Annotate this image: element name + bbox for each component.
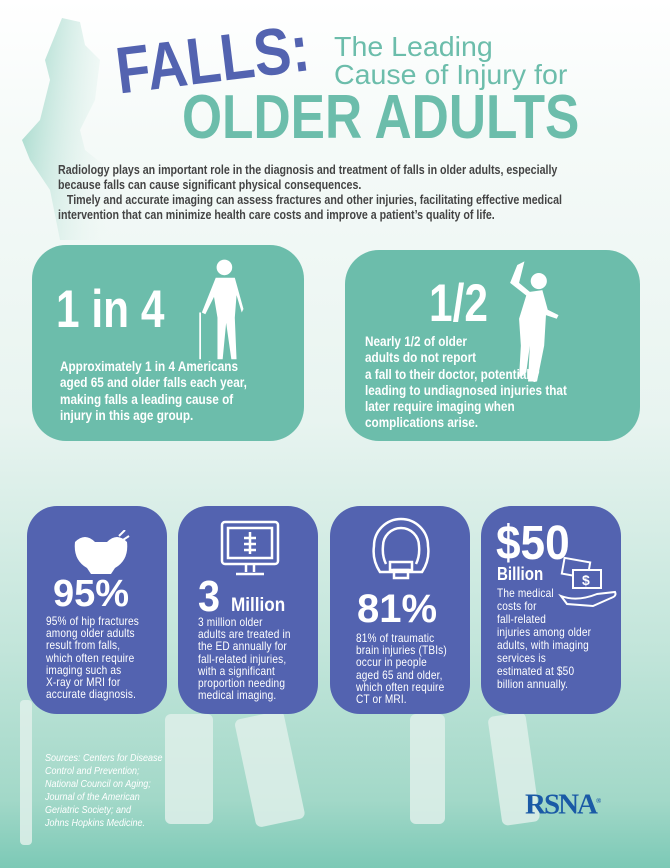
panel: 95% bbox=[27, 506, 167, 714]
description: aged 65 and older, bbox=[356, 668, 443, 682]
intro text: intervention that can minimize health care costs and improve a patient’s quality of life. bbox=[58, 207, 495, 222]
sources: Johns Hopkins Medicine. bbox=[45, 818, 145, 829]
description bbox=[46, 614, 139, 701]
intro text: Radiology plays an important role in the diagnosis and treatment of falls in older adults, especially bbox=[58, 162, 557, 177]
description: injuries among older bbox=[497, 625, 591, 639]
label Billion: Billion bbox=[497, 564, 543, 584]
description bbox=[497, 586, 591, 691]
stat 1 in 4: 1 in 4 bbox=[56, 280, 164, 339]
description: leading to undiagnosed injuries that bbox=[365, 382, 567, 398]
description: 81% of traumatic bbox=[356, 631, 434, 645]
panel: 3 Million bbox=[178, 506, 318, 714]
description bbox=[60, 358, 247, 423]
description: later require imaging when bbox=[365, 398, 515, 414]
description: services is bbox=[497, 651, 546, 665]
description: making falls a leading cause of bbox=[60, 391, 233, 407]
sources bbox=[45, 753, 163, 829]
description: accurate diagnosis. bbox=[46, 687, 136, 701]
description: estimated at $50 bbox=[497, 664, 574, 678]
description: the ED annually for bbox=[198, 639, 287, 653]
title: FALLS: FALLS: bbox=[112, 10, 313, 107]
description: brain injuries (TBIs) bbox=[356, 643, 447, 657]
description: 95% of hip fractures bbox=[46, 614, 139, 628]
description: injury in this age group. bbox=[60, 407, 193, 423]
sources: Geriatric Society; and bbox=[45, 805, 131, 816]
description: which often require bbox=[46, 651, 134, 665]
sources: Control and Prevention; bbox=[45, 766, 140, 777]
title: OLDER ADULTS: OLDER ADULTS bbox=[182, 83, 579, 152]
icon: falling person bbox=[510, 262, 558, 382]
description: fall-related bbox=[497, 612, 546, 626]
description: Nearly 1/2 of older bbox=[365, 333, 467, 349]
subtitle bbox=[334, 31, 567, 90]
panel: 81% bbox=[330, 506, 470, 714]
description: The medical bbox=[497, 586, 554, 600]
stat 3 Million: 3 Million bbox=[198, 572, 285, 621]
description: adults are treated in bbox=[198, 627, 291, 641]
description: medical imaging. bbox=[198, 688, 276, 702]
stat 1/2: 1/2 bbox=[429, 274, 488, 333]
description: which often require bbox=[356, 680, 444, 694]
sources: Journal of the American bbox=[45, 792, 140, 803]
description: billion annually. bbox=[497, 677, 568, 691]
stat 95%: 95% bbox=[53, 573, 129, 615]
icon: elderly man with cane bbox=[199, 260, 244, 360]
description bbox=[198, 615, 291, 702]
description: 3 million older bbox=[198, 615, 263, 629]
sources: National Council on Aging; bbox=[45, 779, 151, 790]
stat 81%: 81% bbox=[357, 587, 437, 631]
icon: money hand bbox=[558, 556, 616, 607]
description: X-ray or MRI for bbox=[46, 675, 120, 689]
logo: RSNA: RSNA® bbox=[525, 789, 599, 821]
description bbox=[365, 333, 567, 430]
icon: x-ray monitor bbox=[220, 520, 280, 576]
description: with a significant bbox=[198, 664, 275, 678]
description: Approximately 1 in 4 Americans bbox=[60, 358, 238, 374]
description: fall-related injuries, bbox=[198, 652, 286, 666]
description: result from falls, bbox=[46, 638, 120, 652]
panel: $50 Billion bbox=[481, 506, 621, 714]
icon: pelvis bbox=[74, 530, 130, 574]
description: a fall to their doctor, potentially bbox=[365, 366, 539, 382]
icon: money hand: $ bbox=[582, 572, 590, 588]
description: occur in people bbox=[356, 655, 427, 669]
description: adults, with imaging bbox=[497, 638, 589, 652]
description bbox=[356, 631, 447, 706]
panel: 1 in 4 bbox=[32, 245, 304, 441]
stat $50: $50 bbox=[496, 517, 570, 570]
icon: CT scanner bbox=[372, 518, 430, 580]
subtitle: Cause of Injury for bbox=[334, 59, 567, 90]
description: proportion needing bbox=[198, 676, 285, 690]
description: among older adults bbox=[46, 626, 135, 640]
intro text bbox=[58, 162, 562, 222]
subtitle: The Leading bbox=[334, 31, 493, 62]
panel: 1/2 bbox=[345, 250, 640, 441]
intro text: because falls can cause significant physical consequences. bbox=[58, 177, 361, 192]
description: imaging such as bbox=[46, 663, 121, 677]
intro text: Timely and accurate imaging can assess fractures and other injuries, facilitating effective medical bbox=[67, 192, 562, 207]
description: complications arise. bbox=[365, 414, 478, 430]
description: aged 65 and older falls each year, bbox=[60, 374, 247, 390]
description: costs for bbox=[497, 599, 537, 613]
description: CT or MRI. bbox=[356, 692, 407, 706]
sources: Sources: Centers for Disease bbox=[45, 753, 163, 764]
description: adults do not report bbox=[365, 349, 476, 365]
